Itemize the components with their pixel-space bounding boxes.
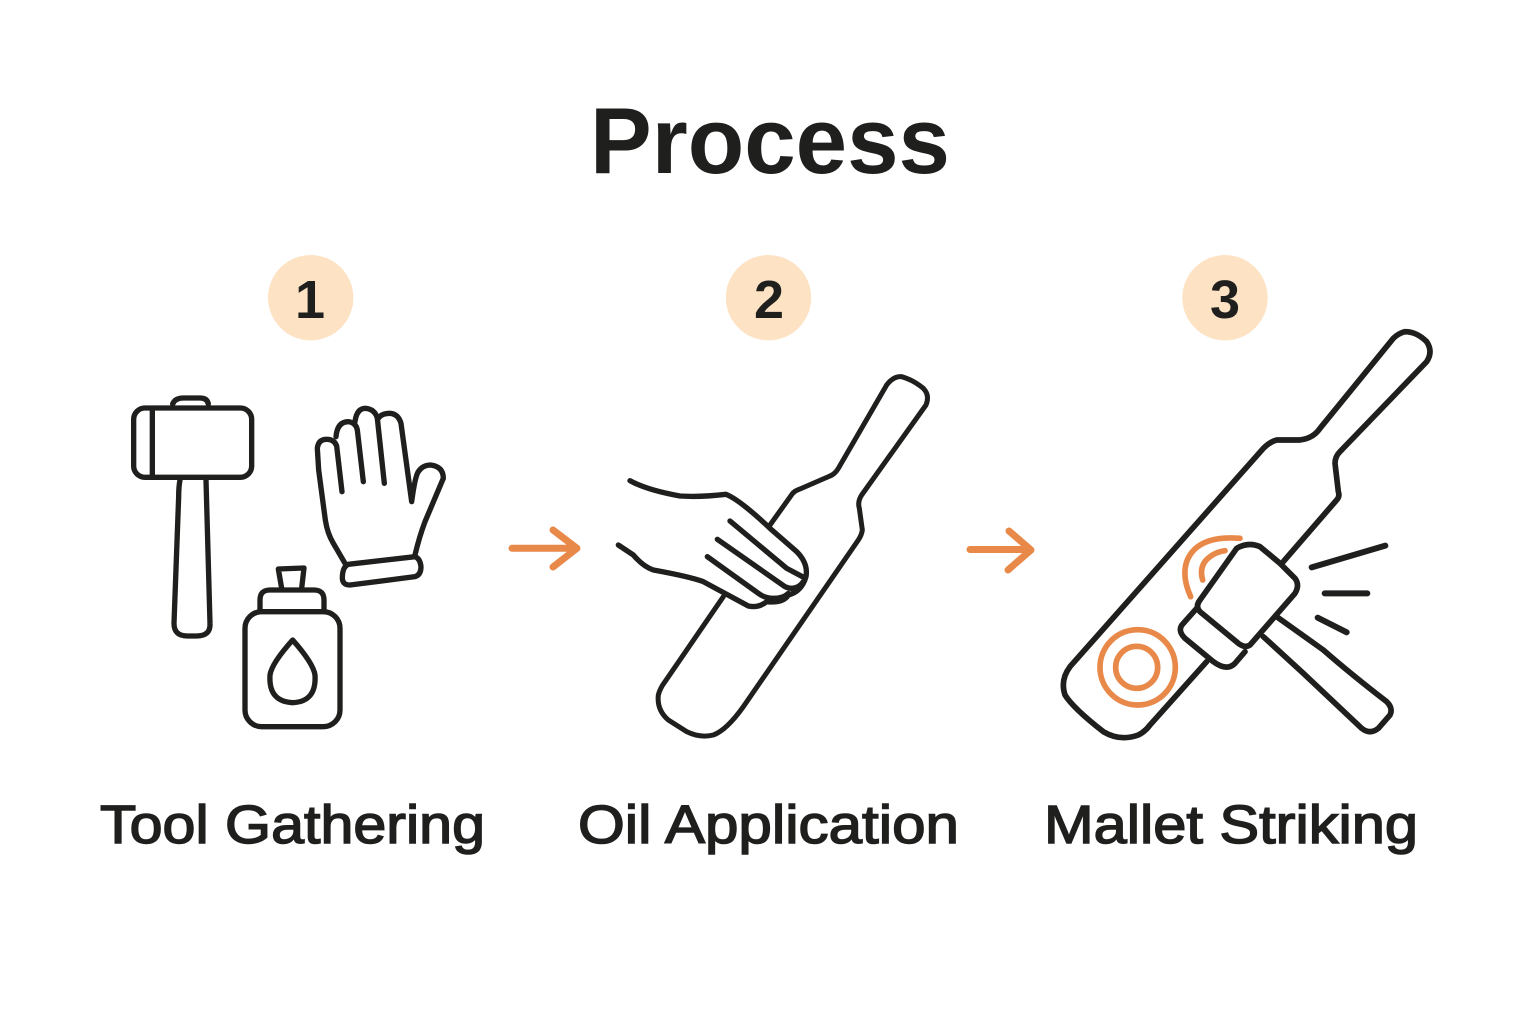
number badge 2: 2 bbox=[754, 270, 784, 330]
icon: glove bbox=[317, 408, 443, 585]
step label: Mallet Striking bbox=[1044, 795, 1418, 855]
step label: Tool Gathering bbox=[100, 795, 485, 855]
icon: mallet bbox=[134, 398, 252, 636]
arrow: step 2 to step 3 bbox=[970, 531, 1031, 570]
icon: oil bottle bbox=[245, 568, 340, 727]
illustration: striking mallet bbox=[1180, 545, 1391, 732]
illustration: hand bbox=[618, 481, 806, 607]
illustration: paddle bbox=[658, 377, 927, 736]
panel: step 3 mallet striking bbox=[1044, 255, 1430, 855]
number badge 3 bbox=[1182, 255, 1268, 340]
number badge 2 bbox=[726, 255, 811, 340]
panel: step 1 tool gathering bbox=[100, 255, 485, 855]
number badge 1: 1 bbox=[295, 270, 325, 330]
panel: step 2 oil application bbox=[578, 255, 959, 855]
arrow: step 1 to step 2 bbox=[512, 530, 577, 567]
number badge 1 bbox=[268, 255, 353, 340]
number badge 3: 3 bbox=[1210, 270, 1240, 330]
impact lines bbox=[1312, 546, 1385, 632]
title: Process bbox=[590, 88, 950, 193]
illustration: paddle with strike marks bbox=[1063, 332, 1430, 738]
step label: Oil Application bbox=[578, 795, 959, 855]
